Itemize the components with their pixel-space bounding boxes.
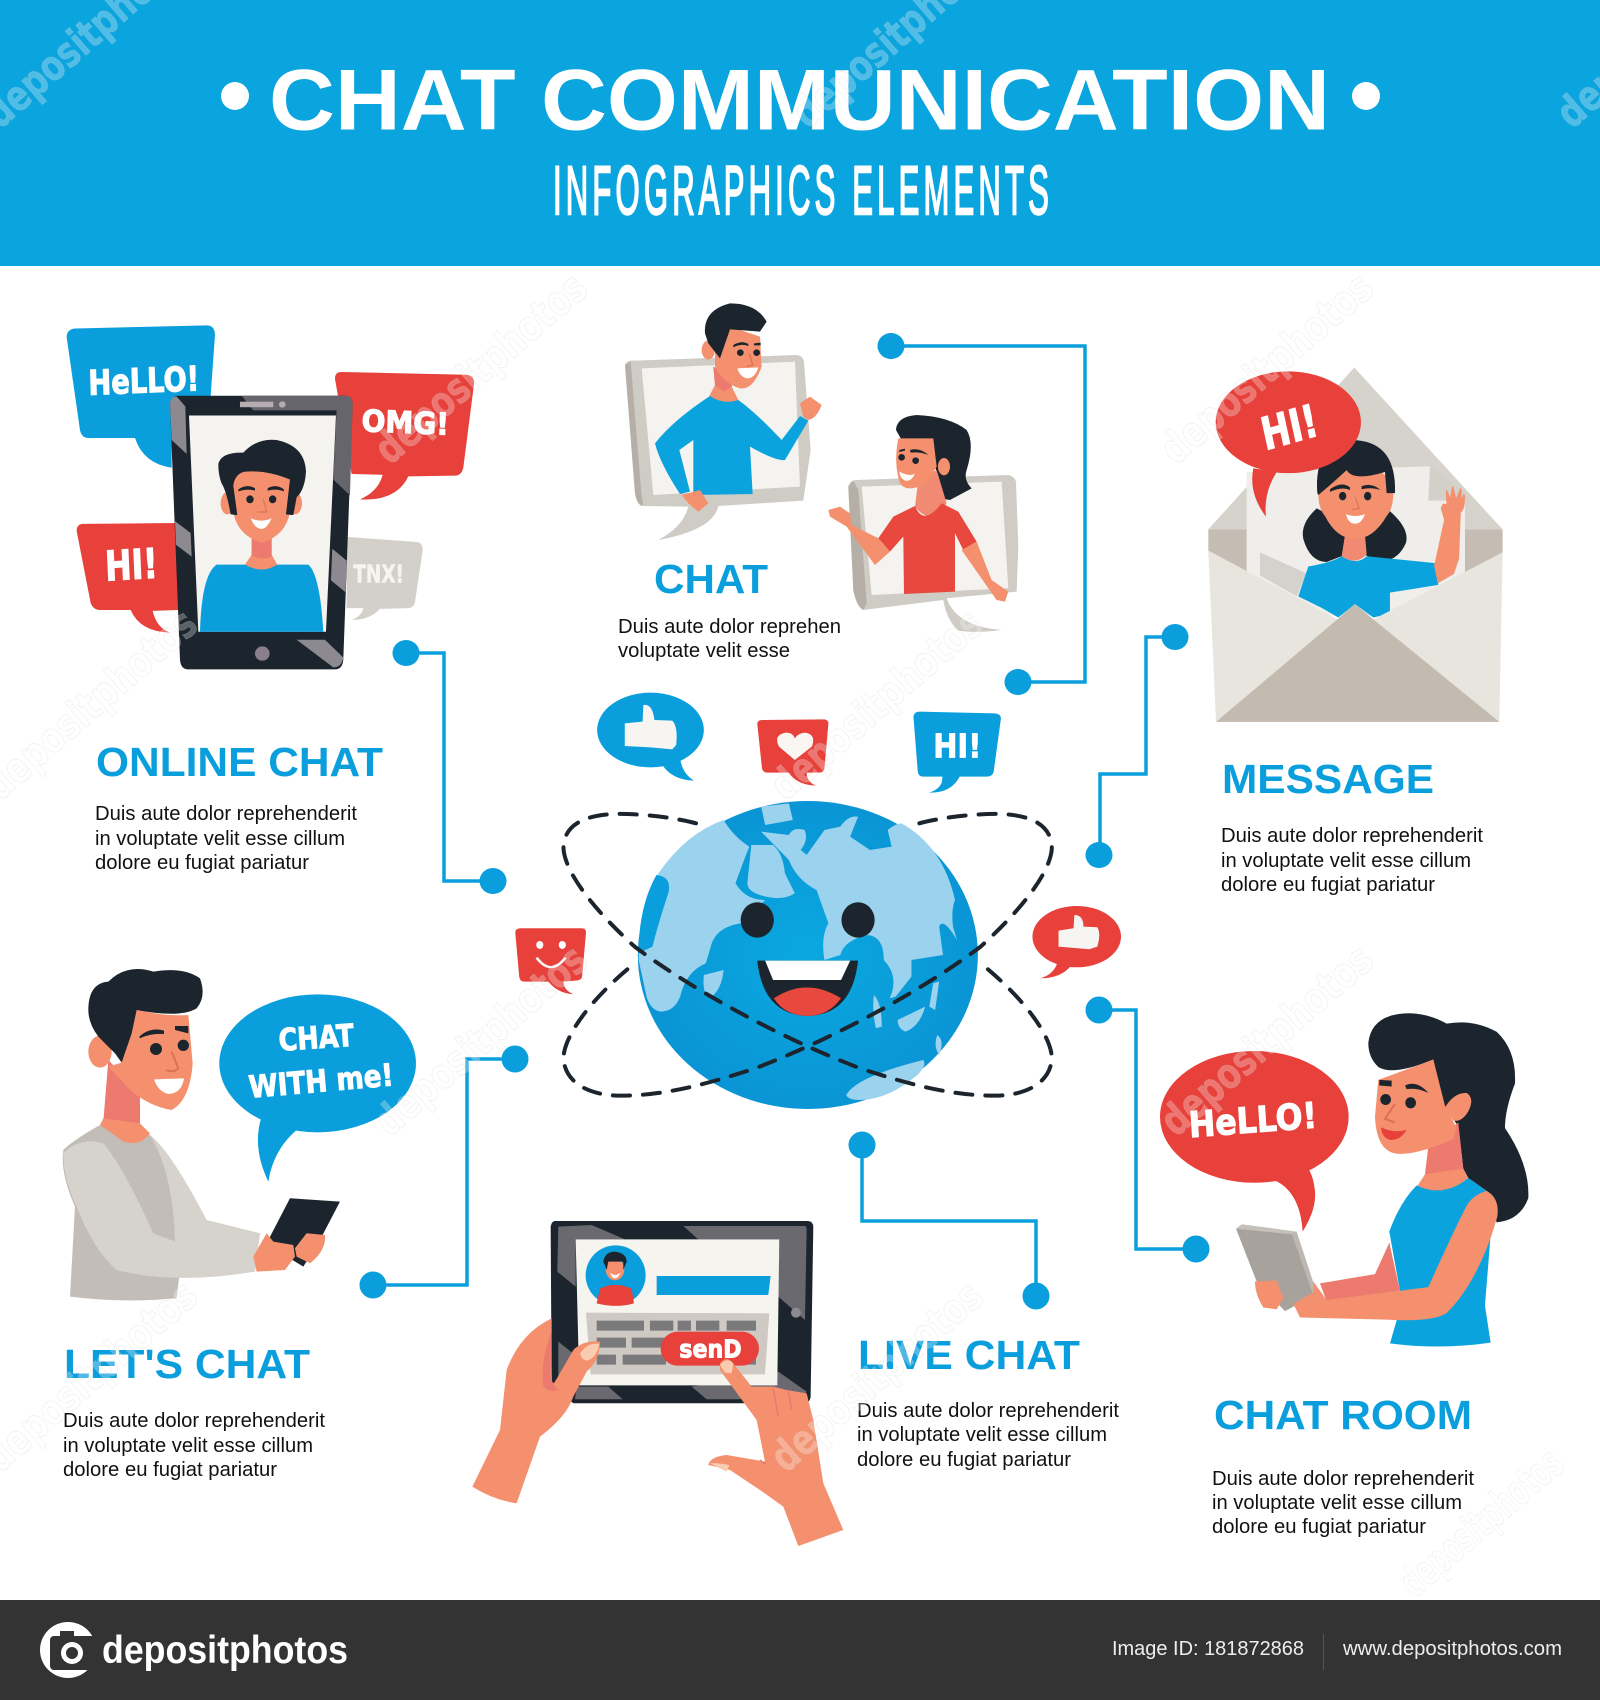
watermark: depositphotos	[364, 935, 597, 1146]
connector: let's chat	[360, 1046, 528, 1298]
globe	[638, 801, 978, 1109]
watermark: depositphotos	[1150, 263, 1383, 474]
watermark: depositphotos	[760, 599, 993, 810]
icon: red thumbs up bubble	[1032, 906, 1121, 978]
heading: chat room: CHAT ROOM	[1214, 1392, 1472, 1438]
header banner	[0, 0, 1600, 266]
text block: chat room: Duis aute dolor reprehenderit	[1212, 1467, 1474, 1490]
icon: blue hi bubble: HI!	[933, 727, 981, 766]
illustration: envelope with waving woman	[1208, 368, 1503, 722]
text block: message: dolore eu fugiat pariatur	[1221, 873, 1435, 896]
illustration: online chat tablet with speech bubbles: OMG!	[361, 403, 449, 442]
title: CHAT COMMUNICATION	[269, 52, 1330, 148]
logo wordmark: depositphotos	[102, 1629, 348, 1672]
orbits	[563, 814, 1052, 1096]
image id: Image ID: 181872868	[1112, 1638, 1304, 1660]
connector: live chat	[848, 1132, 1050, 1310]
text block: let's chat: dolore eu fugiat pariatur	[63, 1458, 277, 1481]
text block: chat: voluptate velit esse	[618, 639, 790, 662]
text block: message: in voluptate velit esse cillum	[1221, 849, 1471, 872]
icon: left hand	[472, 1318, 600, 1503]
illustration: online chat tablet with speech bubbles	[67, 325, 474, 669]
illustration: chat between man and woman in speech frames	[625, 303, 1018, 632]
text block: chat room: in voluptate velit esse cillum	[1212, 1491, 1462, 1514]
connector: message	[1086, 624, 1188, 868]
heading: live chat: LIVE CHAT	[858, 1332, 1080, 1378]
illustration: envelope with waving woman: HI!	[1256, 394, 1322, 461]
heading: let's chat: LET'S CHAT	[64, 1341, 310, 1387]
text block: live chat: in voluptate velit esse cillum	[857, 1423, 1107, 1446]
bubble text: chat with me: WITH me!	[247, 1058, 395, 1106]
text block: let's chat: Duis aute dolor reprehenderit	[63, 1409, 325, 1432]
illustration: man with phone and chat bubble	[63, 969, 416, 1300]
text block: live chat: Duis aute dolor reprehenderit	[857, 1399, 1119, 1422]
watermark: depositphotos	[364, 263, 597, 474]
bubble text: chat with me	[247, 1019, 395, 1106]
bubble text: chat with me: CHAT	[277, 1019, 355, 1059]
heading: chat: CHAT	[654, 556, 768, 602]
footer bar	[0, 1600, 1600, 1700]
website: www.depositphotos.com	[1342, 1638, 1562, 1660]
text block: online chat: dolore eu fugiat pariatur	[95, 851, 309, 874]
illustration: online chat tablet with speech bubbles: HI!	[104, 540, 159, 590]
illustration: woman with tablet and hello bubble: HeLLO!	[1188, 1095, 1318, 1146]
text block: chat: Duis aute dolor reprehen	[618, 615, 841, 638]
icon: blue hi bubble	[913, 712, 1001, 793]
text block: message: Duis aute dolor reprehenderit	[1221, 824, 1483, 847]
icon: camera logo	[40, 1622, 96, 1678]
connector: online chat	[392, 640, 506, 894]
watermark: depositphotos	[1150, 935, 1383, 1146]
illustration: smiling globe with orbits and reaction bubbles	[515, 693, 1121, 1109]
text block: let's chat: in voluptate velit esse cillum	[63, 1434, 313, 1457]
connector: chat room	[1086, 996, 1210, 1262]
text block: online chat: Duis aute dolor reprehenderit	[95, 802, 357, 825]
send button: senD	[679, 1334, 742, 1363]
icon: red heart bubble	[757, 719, 828, 786]
text block: online chat: in voluptate velit esse cillum	[95, 827, 345, 850]
heading: online chat: ONLINE CHAT	[96, 739, 383, 785]
subtitle: INFOGRAPHICS ELEMENTS	[553, 153, 1049, 229]
connector: chat	[878, 333, 1085, 695]
heading: message: MESSAGE	[1222, 756, 1434, 802]
illustration: online chat tablet with speech bubbles: HeLLO!	[88, 360, 200, 403]
icon: right hand	[708, 1359, 843, 1546]
send button	[661, 1332, 759, 1366]
text block: live chat: dolore eu fugiat pariatur	[857, 1448, 1071, 1471]
watermark: depositphotos	[760, 1271, 993, 1482]
illustration: online chat tablet with speech bubbles: TNX!	[353, 561, 404, 589]
text block: chat room: dolore eu fugiat pariatur	[1212, 1515, 1426, 1538]
icon: blue thumbs up bubble	[597, 693, 704, 781]
illustration: woman with tablet and hello bubble	[1160, 1013, 1528, 1346]
icon: red smile bubble	[515, 928, 586, 994]
illustration: hands holding tablet with send button	[472, 1221, 843, 1546]
